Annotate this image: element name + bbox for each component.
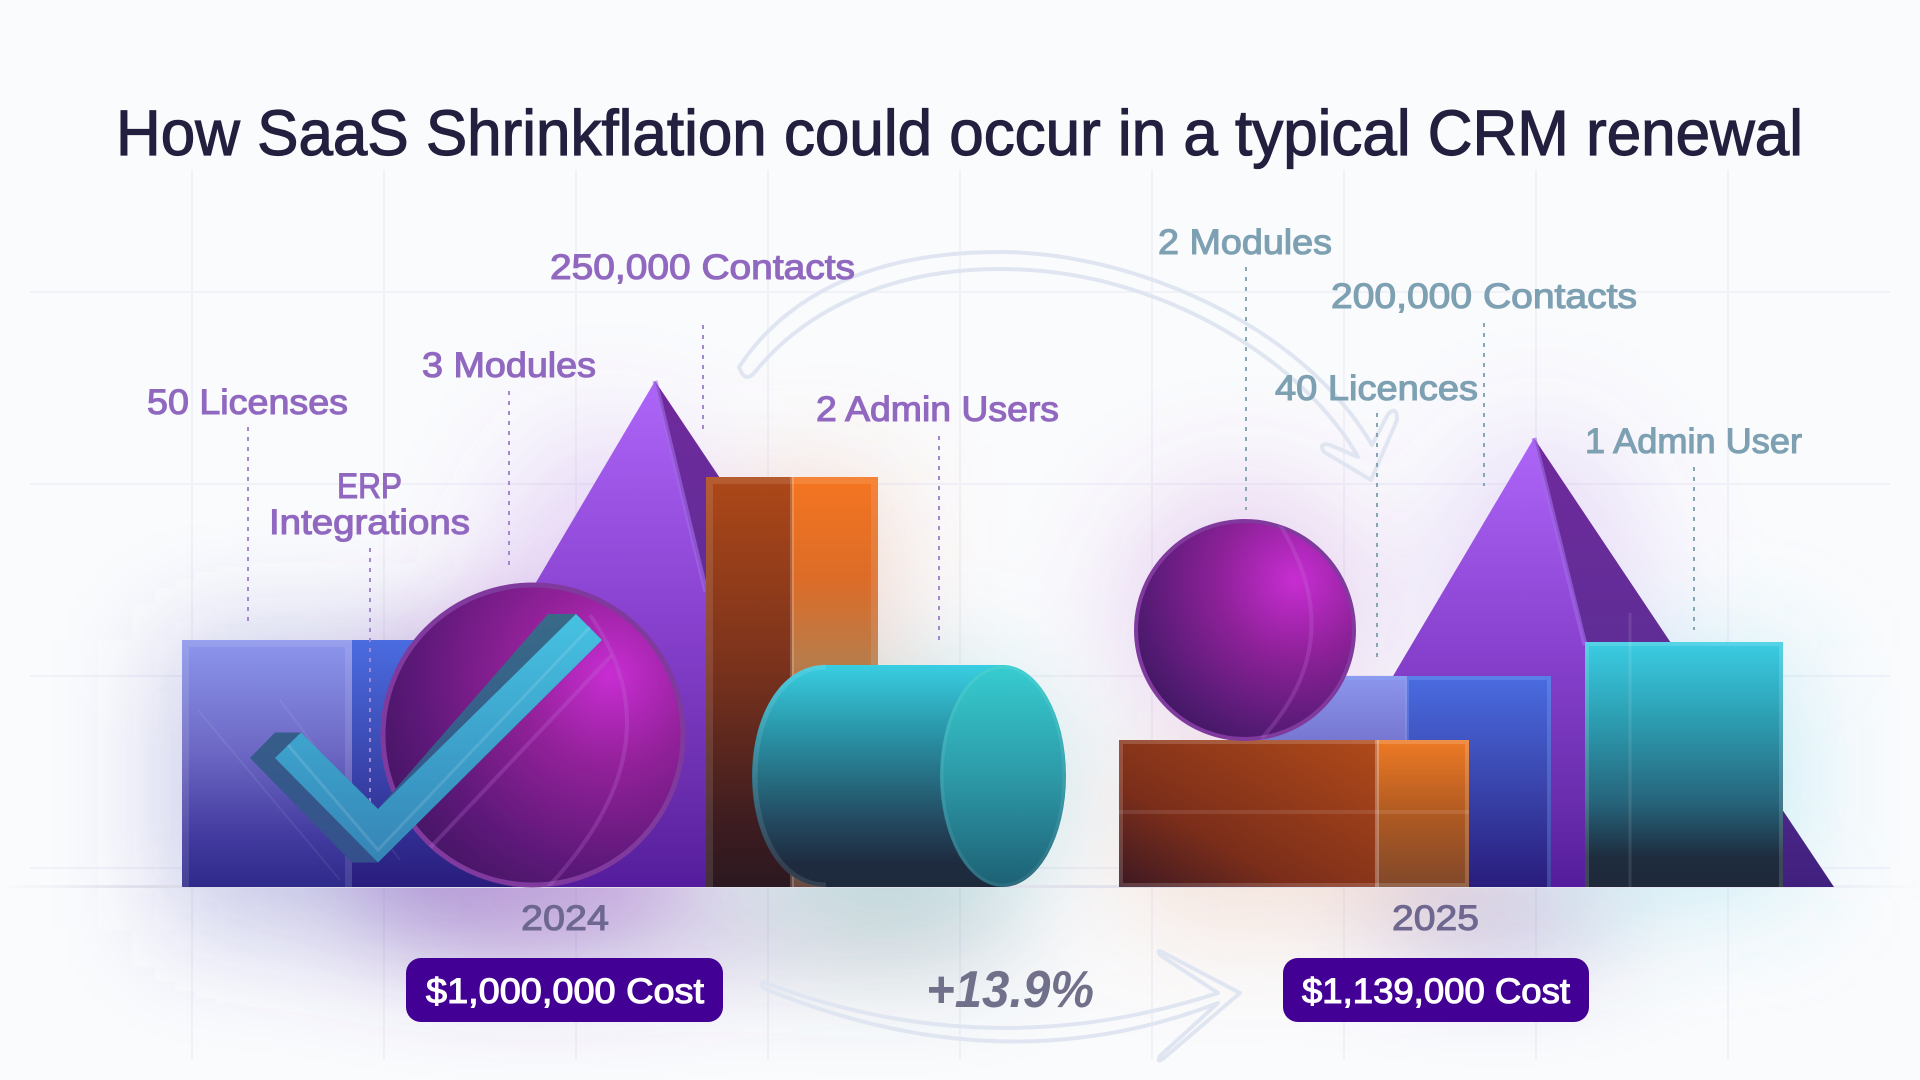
percent change: +13.9% [926,961,1094,1019]
label: 2 Admin Users: 2 Admin Users [816,390,1059,429]
pyramid 2024 [356,381,776,887]
cost pill 2024: $1,000,000 Cost [426,972,704,1011]
background glows [175,430,1800,960]
2024 stack of shapes [182,381,1066,887]
cylinder 2024 [752,665,1066,887]
box: blue 2024 [182,640,512,887]
label: ERP Integrations: Integrations [269,503,470,542]
box: blue 2025 [1240,676,1551,887]
box: teal 2025 [1585,613,1783,887]
pyramid 2025 [1268,438,1834,887]
label: 1 Admin User: 1 Admin User [1585,422,1802,461]
label: 2 Modules: 2 Modules [1158,223,1332,262]
label: 200,000 Contacts: 200,000 Contacts [1331,277,1637,316]
cost pill 2024 [406,958,723,1022]
label: 250,000 Contacts: 250,000 Contacts [550,248,855,287]
label: ERP Integrations: ERP [337,467,402,506]
icon: checkmark [250,614,602,862]
box: orange 2024 [706,477,878,887]
sphere 2024 [383,585,683,887]
label: ERP Integrations [269,467,470,803]
cost pill 2025 [1283,958,1589,1022]
label: 40 Licences: 40 Licences [1275,369,1478,408]
title: How SaaS Shrinkflation could occur in a typical CRM renewal [116,97,1803,169]
box: orange 2025 [1119,740,1469,887]
label: 3 Modules: 3 Modules [422,346,596,385]
floor line [0,885,1920,888]
label: 50 Licenses: 50 Licenses [147,383,348,422]
cost pill 2025: $1,139,000 Cost [1302,972,1570,1011]
background grid [30,170,1890,1060]
2025 stack of shapes [1119,438,1834,887]
sphere 2025 [1136,521,1354,739]
curved arrow: 2024 to 2025 labels [739,252,1397,480]
curved arrow: cost increase [761,951,1240,1061]
year label 2024: 2024 [521,899,609,938]
year label 2025: 2025 [1392,899,1479,938]
